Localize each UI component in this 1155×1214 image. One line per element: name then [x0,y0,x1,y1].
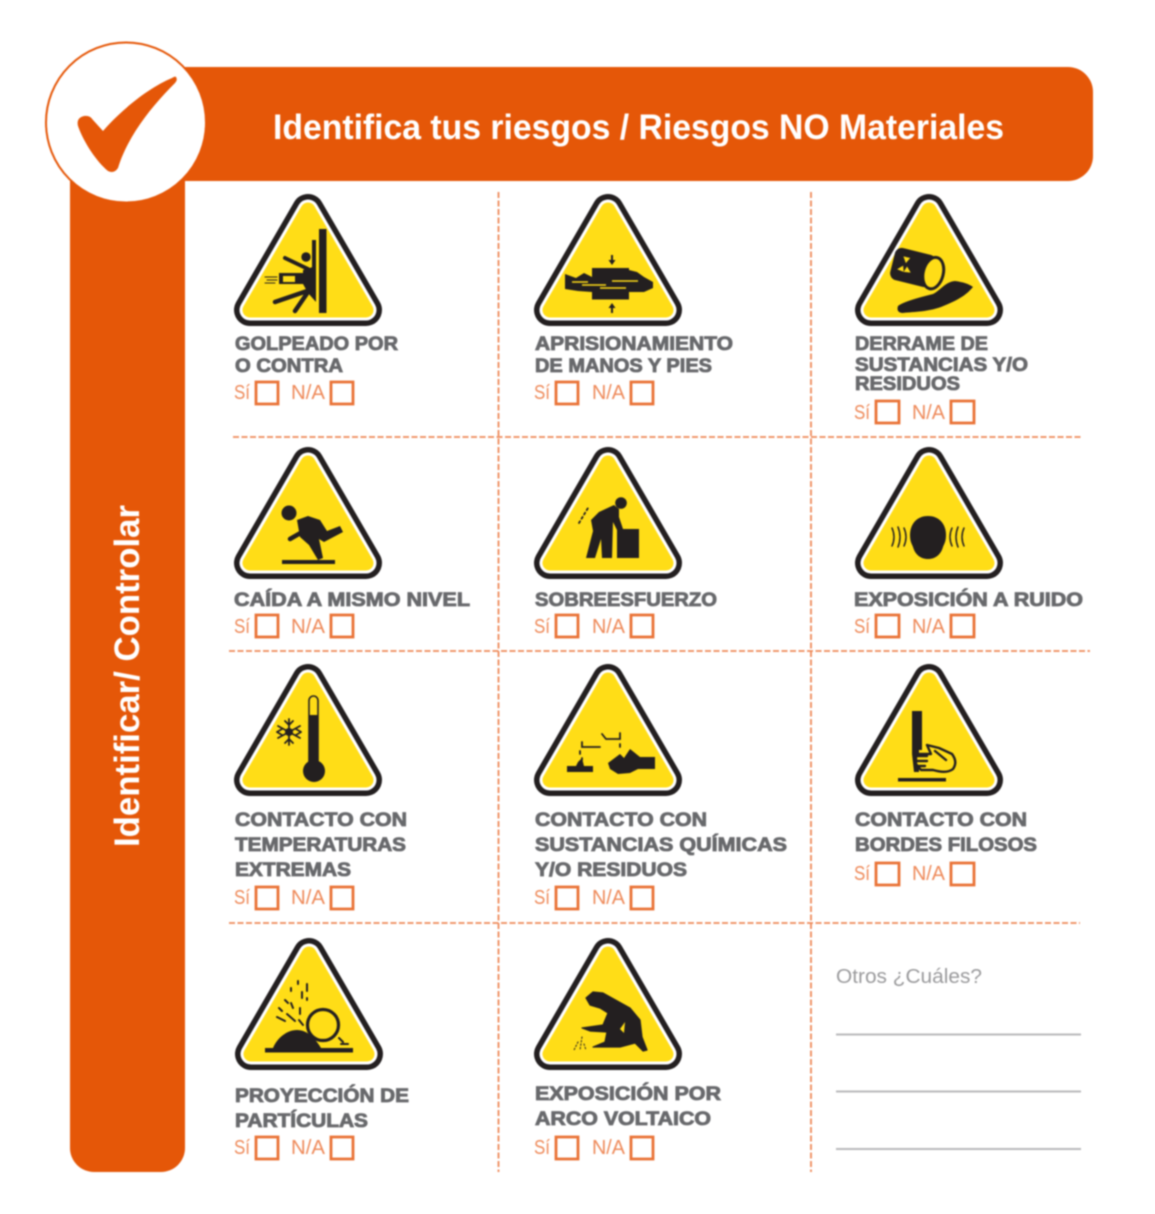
icon: thermometer [250,680,366,782]
side heading: Identificar/ Controlar [108,505,147,847]
panel: bordes [854,680,1037,885]
icon: struck by object [250,210,366,313]
icon: crushed hand [550,210,666,313]
checkboxes [854,863,974,885]
checkboxes: N/A [912,402,946,424]
checkboxes: N/A [592,616,626,638]
checkboxes: N/A [291,616,326,638]
label: SOBREESFUERZO [535,590,717,611]
checkboxes: Sí [534,1137,550,1159]
icon: flying particles [251,954,367,1054]
checkboxes: N/A [912,616,946,638]
checkboxes [234,887,353,909]
label: SUSTANCIAS Y/O [855,355,1028,376]
grid dividers [229,192,1090,1172]
header band [150,67,1093,181]
panel: ruido [854,463,1083,638]
otros heading: Otros ¿Cuáles? [836,966,982,988]
icon: noise [871,463,987,563]
panel: otros [836,966,1081,1149]
checkboxes: N/A [592,382,626,404]
label: CONTACTO CON [535,810,707,831]
label: APRISIONAMIENTO [535,334,733,355]
panel: temperaturas [234,680,407,909]
checkboxes: N/A [592,887,626,909]
checkboxes [854,401,974,424]
checkboxes: Sí [234,616,250,638]
panel: particulas [234,954,409,1159]
checkboxes: Sí [854,616,870,638]
checkboxes: Sí [854,863,870,885]
checkboxes [534,382,653,404]
icon: sharp edge [871,680,987,782]
label: CAÍDA A MISMO NIVEL [234,589,470,611]
label: CONTACTO CON [855,810,1027,831]
icon: overexertion [550,463,666,563]
icon: check badge [46,42,206,202]
checkboxes: Sí [534,887,550,909]
label: ARCO VOLTAICO [535,1109,711,1130]
checkboxes [534,887,653,909]
label [535,1083,721,1130]
label: TEMPERATURAS [235,835,406,856]
label: EXPOSICIÓN POR [535,1083,721,1105]
label: Y/O RESIDUOS [535,860,687,881]
label: EXPOSICIÓN A RUIDO [854,589,1083,611]
checkboxes: Sí [534,616,550,638]
label: DERRAME DE [855,334,988,355]
panel: caida [234,463,470,638]
panel: arco voltaico [534,954,721,1159]
label: GOLPEADO POR [235,334,398,355]
panel: sobreesfuerzo [534,463,717,638]
checkboxes: N/A [291,887,326,909]
label: PARTÍCULAS [235,1110,368,1132]
label: O CONTRA [235,356,343,377]
icon: arc flash [550,954,666,1054]
label: SUSTANCIAS QUÍMICAS [535,834,787,856]
label [855,810,1037,856]
checkboxes [234,382,353,404]
label [235,334,398,377]
label: CONTACTO CON [235,810,407,831]
checkboxes: N/A [912,863,946,885]
checkboxes: N/A [291,1137,326,1159]
checkboxes: N/A [291,382,326,404]
icon: slip and fall [250,463,366,564]
label: PROYECCIÓN DE [235,1085,409,1107]
label [855,334,1028,395]
panel: derrame [854,210,1028,424]
side band [70,120,185,1172]
label [235,810,407,881]
checkboxes: N/A [592,1137,626,1159]
checkboxes [854,615,974,638]
icon: spill [871,210,987,313]
label [535,810,787,881]
panel: golpeado [234,210,398,404]
write-in lines [836,1034,1081,1149]
title: Identifica tus riesgos / Riesgos NO Materiales [273,108,1004,147]
label [535,334,733,377]
checkboxes: Sí [534,382,550,404]
label: RESIDUOS [855,374,960,395]
panel: quimicas [534,680,787,909]
checkboxes: Sí [234,382,250,404]
label: BORDES FILOSOS [855,835,1037,856]
label [235,1085,409,1132]
checkboxes [534,615,653,638]
checkboxes: Sí [234,887,250,909]
checkboxes [234,615,353,638]
panel: aprisionamiento [534,210,733,404]
checkboxes: Sí [854,402,870,424]
checkboxes [234,1137,353,1159]
checkboxes [534,1137,653,1159]
label: EXTREMAS [235,860,351,881]
checkboxes: Sí [234,1137,250,1159]
icon: corrosive [550,680,666,780]
label: DE MANOS Y PIES [535,356,712,377]
